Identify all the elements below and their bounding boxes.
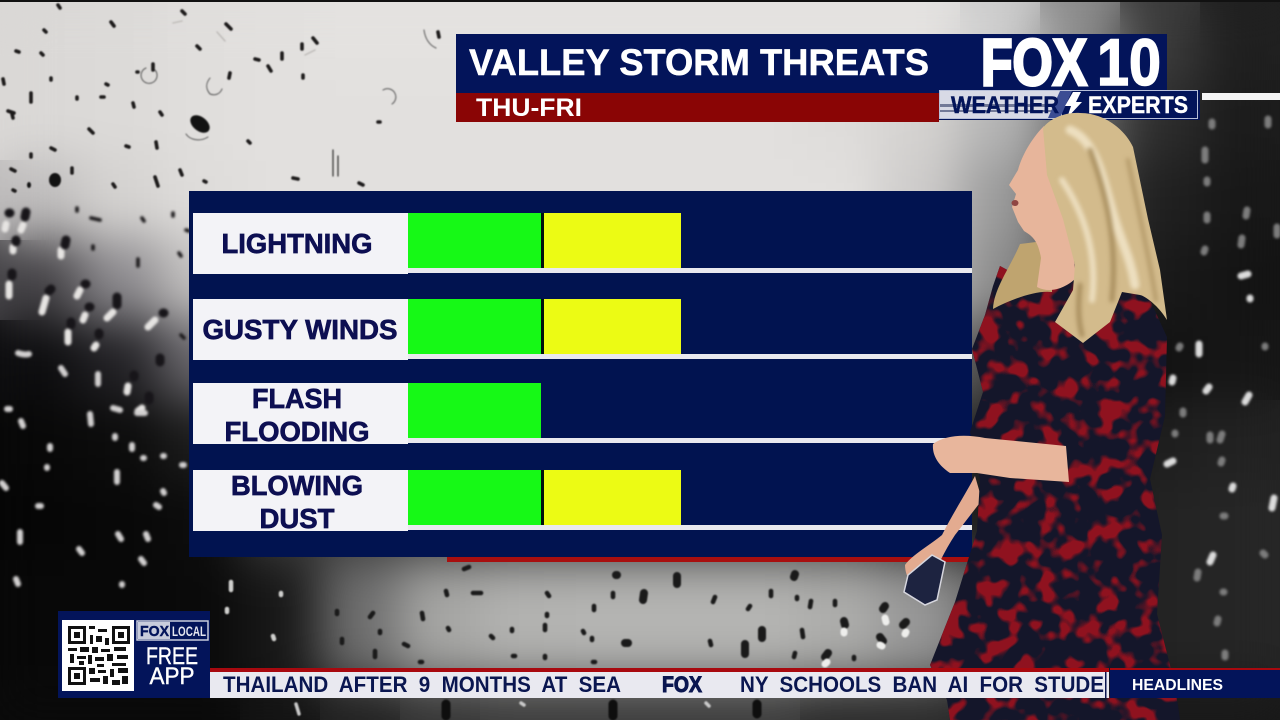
news ticker [210,668,1109,698]
large droplets on light glass [27,112,213,188]
row: lightning: LIGHTNING [222,228,372,259]
row: blowing dust: BLOWING [231,470,363,501]
ticker story 1: THAILAND AFTER 9 MONTHS AT SEA [223,672,621,697]
logo: Weather Experts badge [939,90,1200,120]
front forearm and hand [933,436,1069,482]
panel: threat chart [189,191,972,562]
logo: Weather Experts badge: WEATHER [951,92,1059,119]
droplets right on dark glass [1167,119,1277,657]
row: lightning [193,213,972,274]
FOX LOCAL logo [137,621,208,640]
lips [1012,200,1018,206]
presenter figure [904,113,1180,720]
free app text: FREE [146,643,198,670]
logo: FOX 10: 10 [1097,25,1161,99]
neck and face [1009,126,1076,290]
logo: Weather Experts badge: EXPERTS [1088,92,1188,119]
QR code [62,620,134,691]
QR promo panel [58,611,210,698]
phone [904,555,945,605]
headlines tab [1110,668,1280,698]
hair behind neck [993,240,1052,309]
logo: FOX 10: FOX [981,25,1087,99]
header: title block [456,34,1167,122]
row: flash flooding: FLOODING [224,416,370,447]
row: gusty winds [193,299,972,360]
left arm (back) and hand [905,476,982,591]
row: blowing dust [193,470,972,534]
decorative white bar [1202,93,1280,100]
row: flash flooding: FLASH [252,383,342,414]
FOX LOCAL logo: FOX [140,623,169,640]
title: VALLEY STORM THREATS [469,42,929,83]
ticker FOX logo: FOX [662,672,702,697]
hair main [1043,113,1167,343]
subtitle: date range: THU-FRI [476,94,582,122]
FOX LOCAL logo: LOCAL [172,623,206,639]
droplets left: dark tops with white tails [2,208,189,585]
free app text: APP [150,663,194,690]
dress [930,262,1180,720]
hair strands [1062,130,1156,335]
droplets bottom [227,567,906,716]
row: gusty winds: GUSTY WINDS [202,314,398,345]
icon: lightning bolt [1065,92,1082,118]
headlines tab: HEADLINES [1132,677,1223,694]
row: flash flooding [193,383,972,447]
ticker story 2: NY SCHOOLS BAN AI FOR STUDE [740,672,1104,697]
row: blowing dust: DUST [260,503,334,534]
free app text [146,643,198,690]
